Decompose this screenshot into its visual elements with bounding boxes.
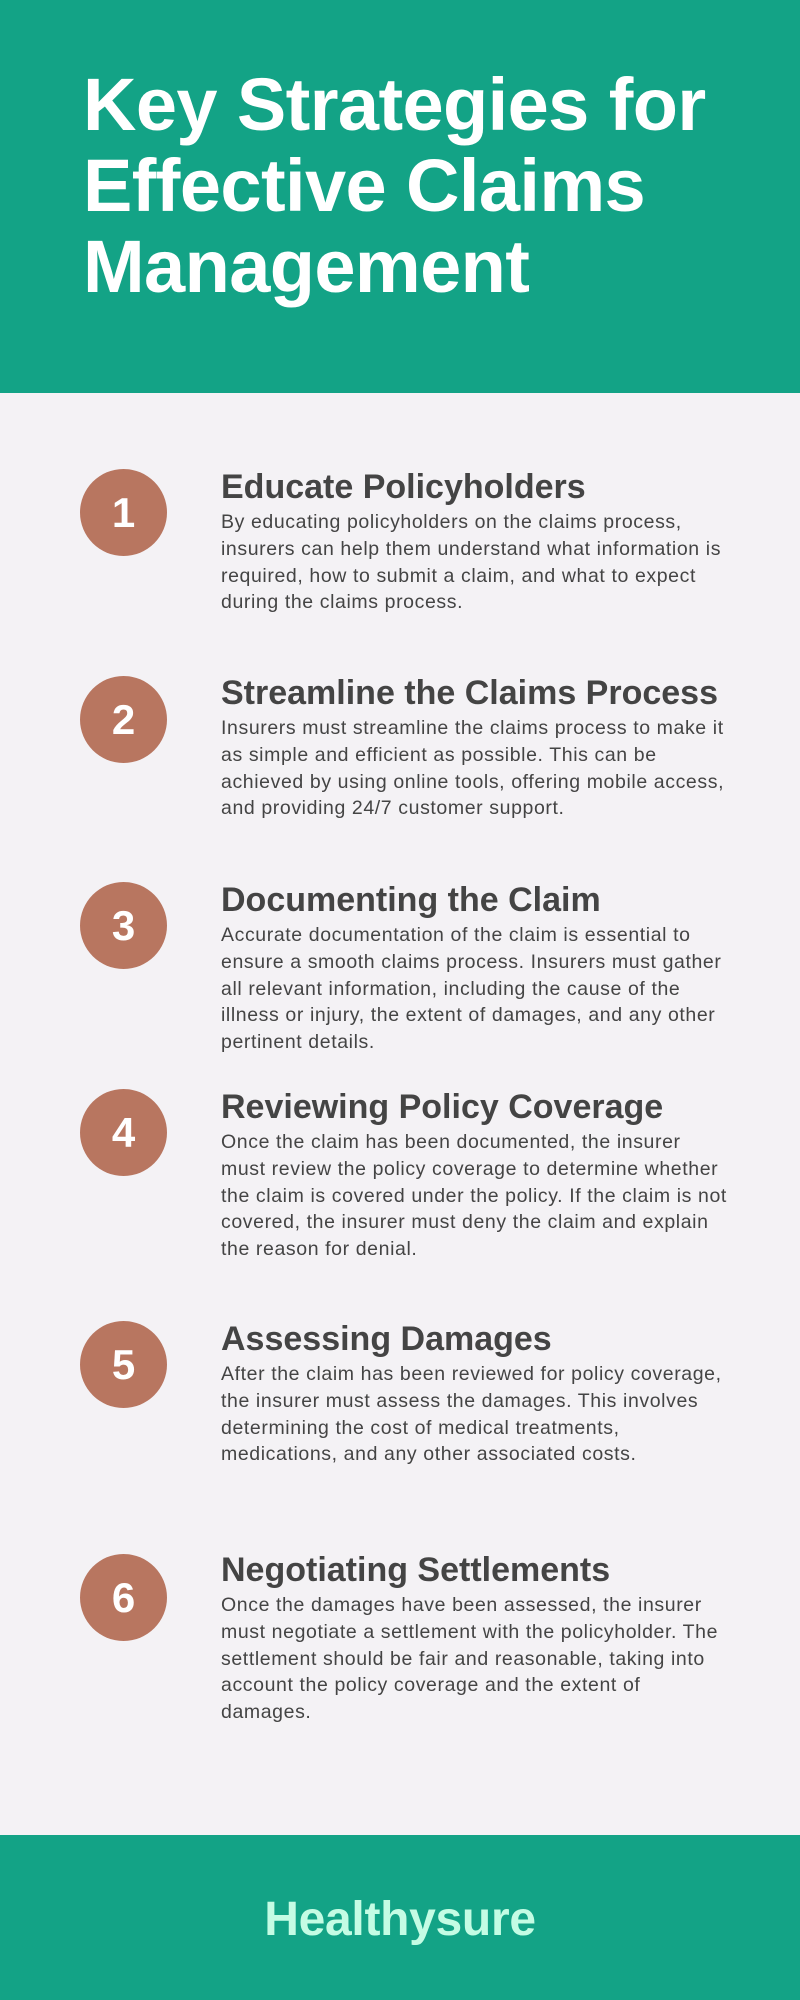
step 3 xyxy=(80,881,721,1053)
footer xyxy=(0,1835,800,2000)
title xyxy=(83,63,706,308)
icon: number 5 circle: 5 xyxy=(112,1341,135,1388)
body: streamline: and providing 24/7 customer support. xyxy=(221,797,565,819)
icon: number 3 circle xyxy=(80,882,167,969)
body: assessing: the insurer must assess the damages. This involves xyxy=(221,1390,698,1412)
heading: streamline: Streamline the Claims Process xyxy=(221,674,718,712)
body: educate xyxy=(221,511,721,613)
body: negotiating: must negotiate a settlement with the policyholder. The xyxy=(221,1621,718,1643)
body: educate: during the claims process. xyxy=(221,591,463,613)
step 6 xyxy=(80,1551,718,1723)
body: streamline: as simple and efficient as possible. This can be xyxy=(221,744,657,766)
heading: reviewing: Reviewing Policy Coverage xyxy=(221,1088,663,1126)
body: assessing: After the claim has been reviewed for policy coverage, xyxy=(221,1363,722,1385)
icon: number 4 circle: 4 xyxy=(112,1109,135,1156)
icon: number 2 circle xyxy=(80,676,167,763)
body: documenting: pertinent details. xyxy=(221,1031,375,1053)
step 1 xyxy=(80,468,721,613)
body: assessing xyxy=(221,1363,722,1465)
step 4 text xyxy=(221,1088,727,1260)
step 1 text xyxy=(221,468,721,613)
heading: documenting: Documenting the Claim xyxy=(221,881,601,919)
step 2 text xyxy=(221,674,724,819)
body: negotiating: Once the damages have been assessed, the insurer xyxy=(221,1594,702,1616)
body: documenting: illness or injury, the extent of damages, and any other xyxy=(221,1004,715,1026)
body: reviewing: Once the claim has been documented, the insurer xyxy=(221,1131,681,1153)
body: educate: required, how to submit a claim, and what to expect xyxy=(221,565,696,587)
body: streamline: Insurers must streamline the claims process to make it xyxy=(221,717,724,739)
body: streamline: achieved by using online tools, offering mobile access, xyxy=(221,771,724,793)
step 2 xyxy=(80,674,724,819)
body: reviewing: the reason for denial. xyxy=(221,1238,417,1260)
icon: number 5 circle xyxy=(80,1321,167,1408)
step 4 xyxy=(80,1088,727,1260)
body: negotiating xyxy=(221,1594,718,1723)
body: assessing: medications, and any other associated costs. xyxy=(221,1443,637,1465)
icon: number 1 circle xyxy=(80,469,167,556)
body: documenting: all relevant information, including the cause of the xyxy=(221,978,680,1000)
step 3 text xyxy=(221,881,721,1053)
logo: Healthysure: Healthysure xyxy=(264,1893,536,1946)
body: reviewing xyxy=(221,1131,727,1260)
icon: number 4 circle xyxy=(80,1089,167,1176)
step 5 text xyxy=(221,1320,722,1465)
heading: negotiating: Negotiating Settlements xyxy=(221,1551,610,1589)
title: Effective Claims xyxy=(83,144,645,227)
icon: number 1 circle: 1 xyxy=(112,489,135,536)
body: streamline xyxy=(221,717,724,819)
body: documenting xyxy=(221,924,721,1053)
header banner xyxy=(0,0,800,393)
icon: number 3 circle: 3 xyxy=(112,902,135,949)
body: negotiating: account the policy coverage and the extent of xyxy=(221,1674,640,1696)
body: documenting: ensure a smooth claims process. Insurers must gather xyxy=(221,951,721,973)
body: reviewing: must review the policy coverage to determine whether xyxy=(221,1158,718,1180)
body: educate: By educating policyholders on the claims process, xyxy=(221,511,682,533)
body: reviewing: the claim is covered under the policy. If the claim is not xyxy=(221,1185,727,1207)
step 5 xyxy=(80,1320,722,1465)
body: documenting: Accurate documentation of the claim is essential to xyxy=(221,924,691,946)
step 6 text xyxy=(221,1551,718,1723)
body: educate: insurers can help them understand what information is xyxy=(221,538,721,560)
body: assessing: determining the cost of medical treatments, xyxy=(221,1417,620,1439)
icon: number 2 circle: 2 xyxy=(112,696,135,743)
heading: assessing: Assessing Damages xyxy=(221,1320,552,1358)
body: negotiating: damages. xyxy=(221,1701,311,1723)
heading: educate policyholders: Educate Policyholders xyxy=(221,468,586,506)
title: Management xyxy=(83,225,529,308)
icon: number 6 circle xyxy=(80,1554,167,1641)
icon: number 6 circle: 6 xyxy=(112,1574,135,1621)
body: reviewing: covered, the insurer must deny the claim and explain xyxy=(221,1211,709,1233)
body: negotiating: settlement should be fair and reasonable, taking into xyxy=(221,1648,705,1670)
title: Key Strategies for xyxy=(83,63,706,146)
